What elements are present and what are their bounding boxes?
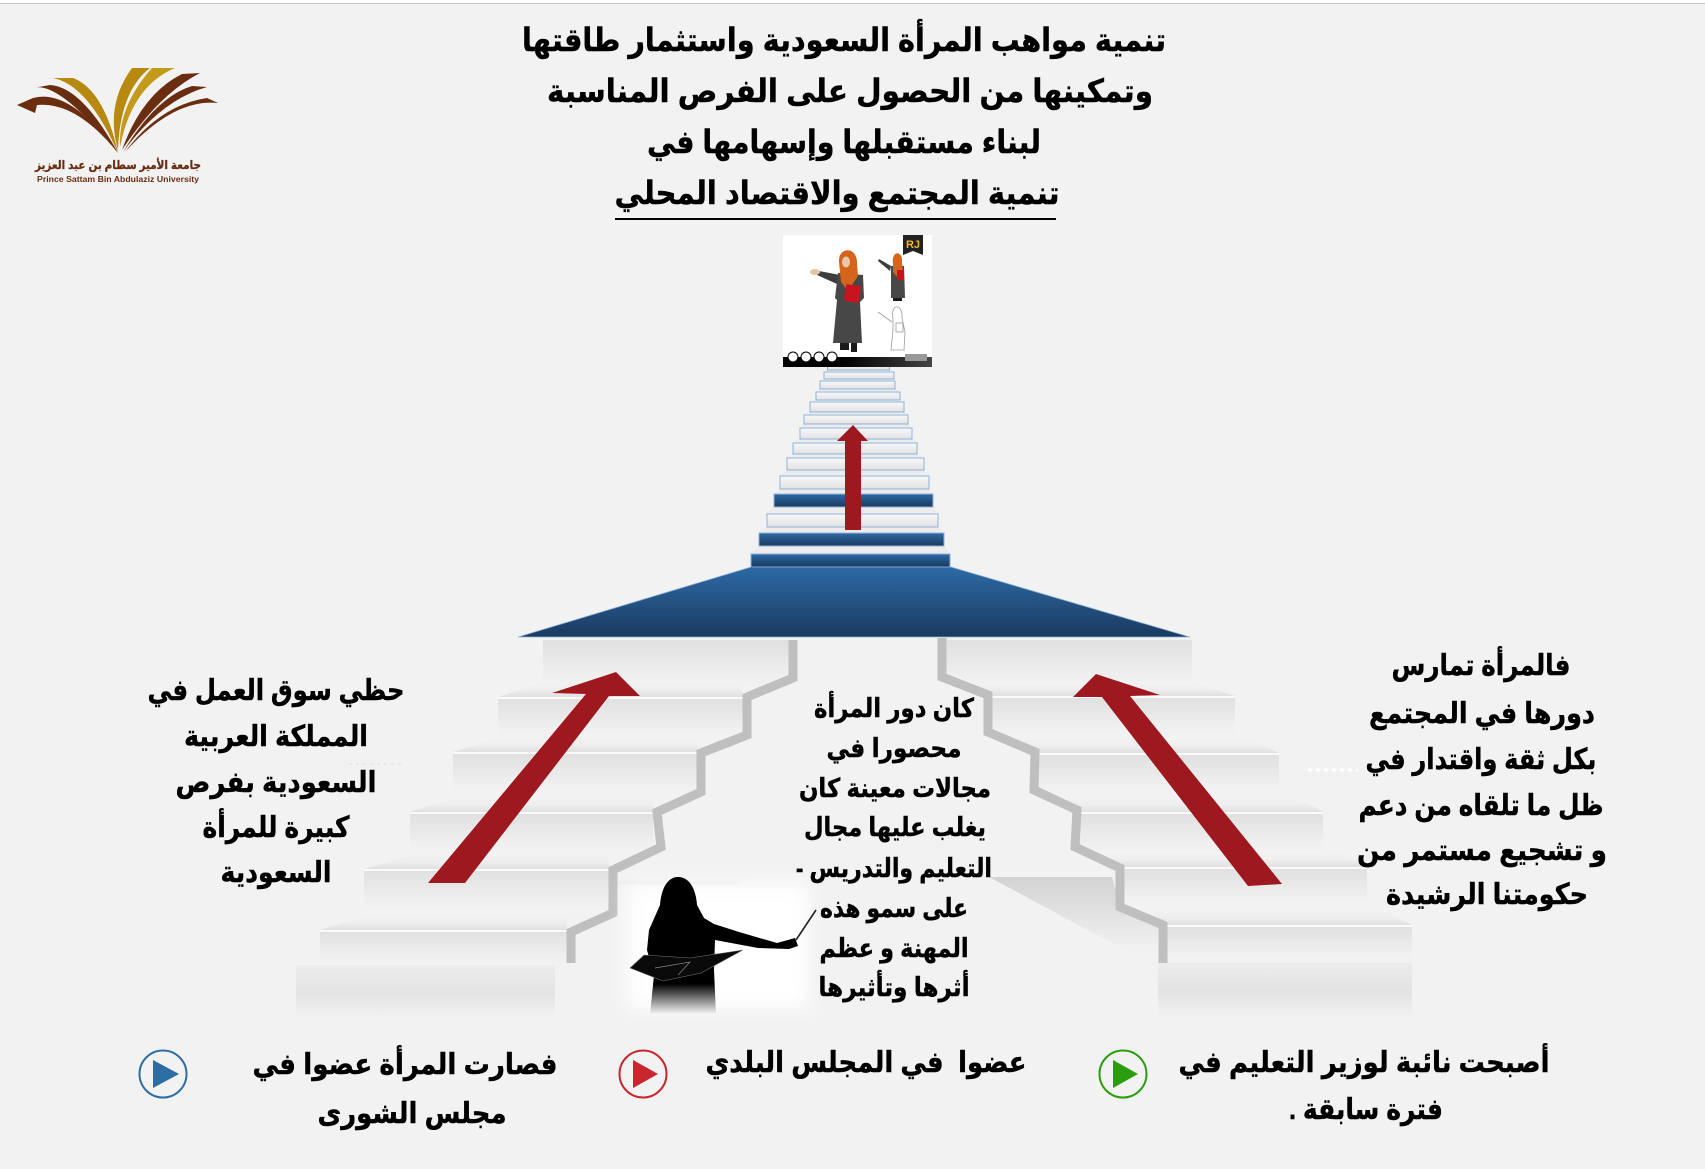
arrow: right red diagonal [1073, 674, 1282, 886]
title: وتمكينها من الحصول على الفرص المناسبة [547, 73, 1153, 110]
text: centre block: المهنة و عظم [820, 933, 968, 964]
icon: green play [1100, 1050, 1146, 1098]
preview bar [783, 352, 932, 367]
icon: red play [620, 1050, 666, 1098]
text: left block: حظي سوق العمل في [148, 675, 404, 707]
text: left block: السعودية بفرص [176, 767, 376, 799]
title: تنمية مواهب المرأة السعودية واستثمار طاقتها [522, 19, 1166, 59]
logo arabic name: جامعة الأمير سطام بن عبد العزيز [34, 157, 201, 173]
image: woman figures [783, 235, 932, 367]
logo english name: Prince Sattam Bin Abdulaziz University [37, 174, 199, 184]
upper staircase [751, 364, 950, 567]
item: municipal council [620, 1047, 1026, 1098]
item: deputy minister: فترة سابقة . [1289, 1094, 1443, 1126]
text: centre block: يغلب عليها مجال [804, 812, 986, 843]
text: centre block: التعليم والتدريس - [796, 853, 992, 884]
blue platform [518, 567, 1190, 637]
item: deputy minister [1100, 1043, 1550, 1126]
item: municipal council: عضوا في المجلس البلدي [706, 1047, 1026, 1079]
text: left block [148, 675, 404, 889]
item: shura council [140, 1045, 558, 1130]
arrow: left red diagonal [428, 672, 640, 883]
title: لبناء مستقبلها وإسهامها في [647, 124, 1041, 162]
item: deputy minister: أصبحت نائبة لوزير التعليم في [1178, 1043, 1550, 1079]
text: centre block: على سمو هذه [820, 893, 968, 924]
text: right block: فالمرأة تمارس [1392, 646, 1570, 682]
silhouette: teacher with pointer [628, 877, 816, 1014]
text: centre block: محصورا في [826, 733, 962, 764]
icon: main woman [810, 250, 864, 352]
title [522, 19, 1166, 220]
icon: open book feathers [17, 68, 218, 153]
title: تنمية المجتمع والاقتصاد المحلي [614, 175, 1060, 212]
text: right block [1357, 646, 1607, 911]
text: right block: ظل ما تلقاه من دعم [1358, 790, 1604, 822]
item: shura council: مجلس الشورى [318, 1098, 506, 1130]
text: right block: دورها في المجتمع [1369, 698, 1595, 730]
text: centre block [796, 691, 992, 1003]
text: right block: حكومتنا الرشيدة [1386, 879, 1588, 911]
left rail [571, 640, 793, 963]
text: left block: المملكة العربية [184, 721, 368, 753]
icon: blue play [140, 1050, 186, 1098]
text: right block: بكل ثقة واقتدار في [1366, 744, 1596, 776]
arrow: centre red up [837, 425, 868, 530]
text: left block: السعودية [220, 857, 332, 889]
icon: RJ badge: RJ [906, 239, 920, 251]
dotted connectors [349, 764, 1358, 770]
item: shura council: فصارت المرأة عضوا في [252, 1045, 558, 1081]
icon: RJ badge [903, 235, 923, 255]
text: centre block: أثرها وتأثيرها [818, 970, 970, 1003]
right staircase [942, 640, 1412, 1017]
text: centre block: كان دور المرأة [814, 691, 975, 724]
left staircase [296, 640, 793, 1017]
text: centre block: مجالات معينة كان [799, 773, 991, 803]
text: right block: و تشجيع مستمر من [1357, 835, 1607, 867]
icon: small woman [878, 253, 905, 301]
logo: Prince Sattam Bin Abdulaziz University [17, 68, 218, 184]
right rail [942, 638, 1163, 963]
text: left block: كبيرة للمرأة [202, 808, 350, 844]
icon: outline woman [878, 307, 905, 350]
